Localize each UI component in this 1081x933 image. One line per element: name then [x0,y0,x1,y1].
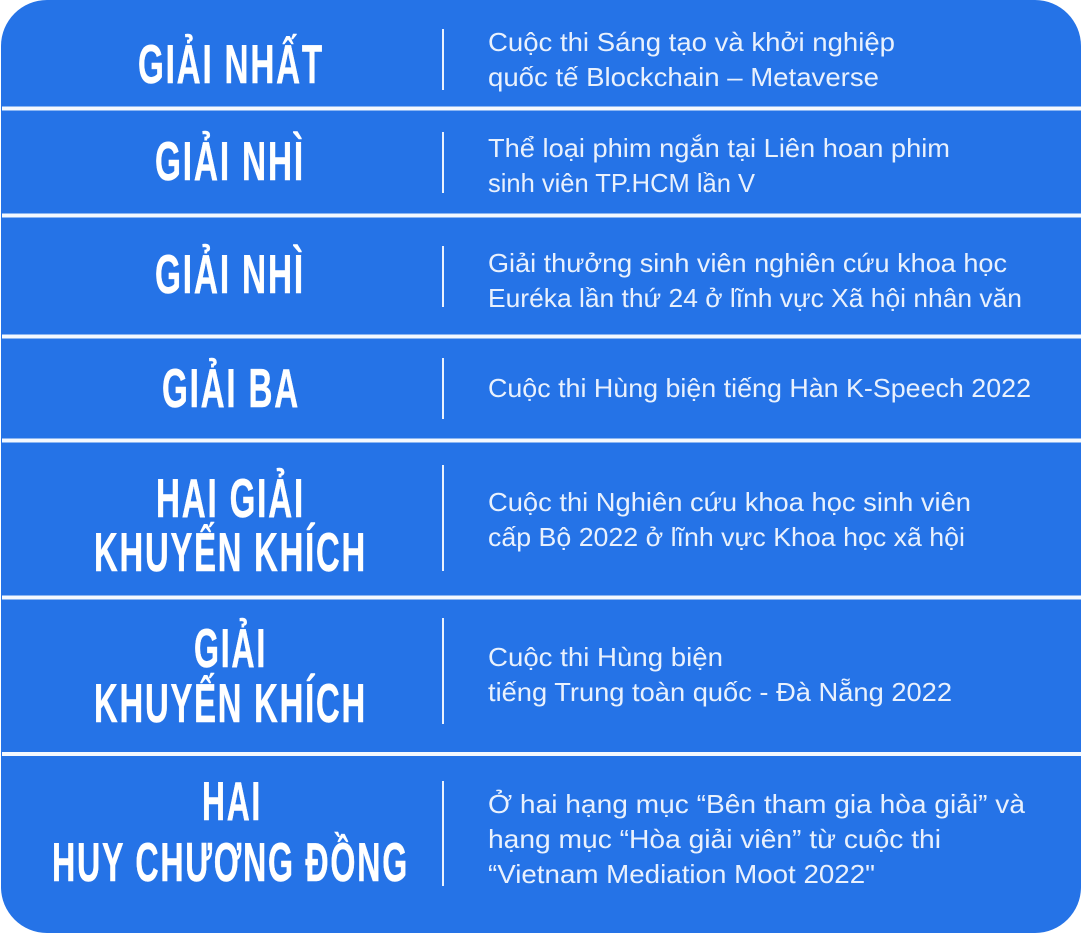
heading: Giải khuyến khích [94,617,367,734]
heading: Giải khuyến khích: KHUYẾN KHÍCH [94,672,367,734]
text: Blockchain Metaverse contest [488,27,895,92]
text: ministry-level research contest: Cuộc thi Nghiên cứu khoa học sinh viên [488,487,971,517]
row 2: second prize, short film [155,130,950,198]
text: Vietnam Mediation Moot [488,788,1026,889]
heading: Hai giải khuyến khích: HAI GIẢI [156,467,305,529]
heading: Hai huy chương đồng [52,770,409,893]
text: Vietnam Mediation Moot: “Vietnam Mediation Moot 2022" [488,859,875,889]
heading: Hai huy chương đồng: HUY CHƯƠNG ĐỒNG [52,831,409,893]
text: Vietnam Mediation Moot: Ở hai hạng mục “Bên tham gia hòa giải” và [488,788,1026,819]
heading: Giải Nhì: GIẢI NHÌ [155,130,305,192]
text: short film festival [488,133,950,198]
text: Blockchain Metaverse contest: quốc tế Blockchain – Metaverse [488,62,879,92]
heading: Hai huy chương đồng: HAI [202,770,262,832]
text: Chinese speech contest: tiếng Trung toàn quốc - Đà Nẵng 2022 [488,677,952,707]
text: Euréka research award [488,248,1022,313]
row 4: third prize [162,357,1031,419]
heading: Hai giải khuyến khích [94,467,367,583]
heading: Giải Nhì: GIẢI NHÌ [155,243,305,305]
row 6: consolation prize [94,617,952,734]
text: Euréka research award: Giải thưởng sinh viên nghiên cứu khoa học [488,248,1007,278]
text: ministry-level research contest: cấp Bộ 2022 ở lĩnh vực Khoa học xã hội [488,522,965,552]
text: Blockchain Metaverse contest: Cuộc thi Sáng tạo và khởi nghiệp [488,27,895,57]
row 1: first prize [138,27,895,95]
row 3: second prize, Euréka [155,243,1022,313]
text: Chinese speech contest: Cuộc thi Hùng biện [488,642,723,672]
text: short film festival: Thể loại phim ngắn tại Liên hoan phim [488,133,950,163]
row 7: two bronze medals [52,770,1026,893]
text: Euréka research award: Euréka lần thứ 24 ở lĩnh vực Xã hội nhân văn [488,283,1022,313]
text: ministry-level research contest [488,487,971,552]
heading: Giải Nhất: GIẢI NHẤT [138,33,324,95]
text: K-Speech contest: Cuộc thi Hùng biện tiếng Hàn K-Speech 2022 [488,373,1031,403]
heading: Giải Ba: GIẢI BA [162,357,300,419]
heading: Giải khuyến khích: GIẢI [194,617,267,679]
row 5: two consolation prizes [94,465,971,583]
heading: Hai giải khuyến khích: KHUYẾN KHÍCH [94,521,367,583]
text: Vietnam Mediation Moot: hạng mục “Hòa giải viên” từ cuộc thi [488,824,941,854]
text: Chinese speech contest [488,642,952,707]
text: short film festival: sinh viên TP.HCM lần V [488,168,756,198]
